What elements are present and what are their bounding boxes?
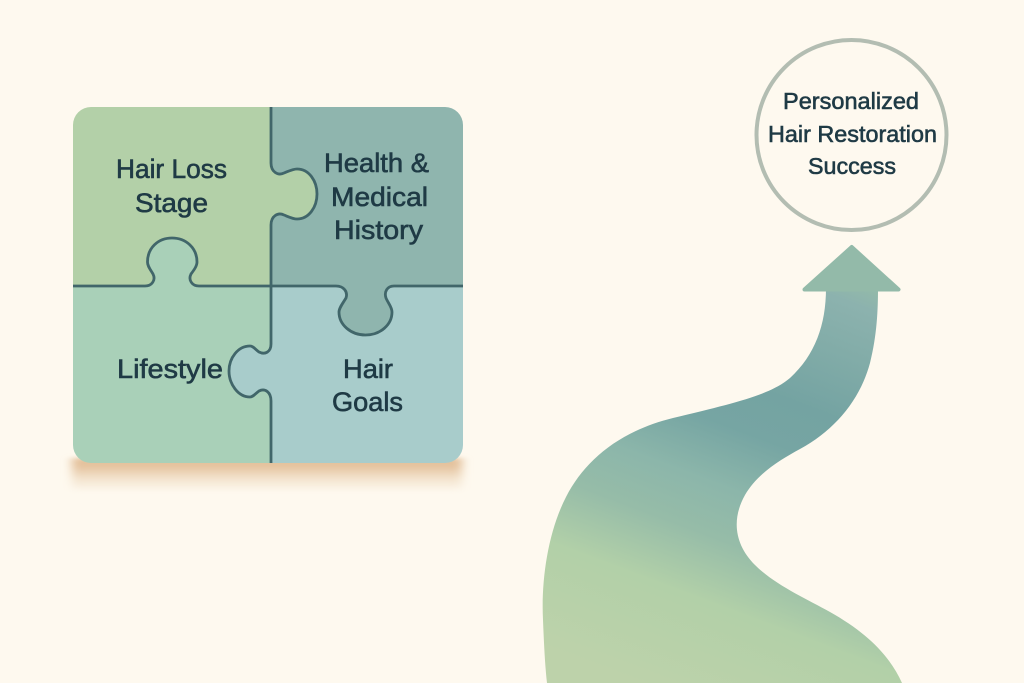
label: Hair Loss Stage: Stage <box>135 188 208 218</box>
goal circle <box>756 40 946 230</box>
label: Hair Goals: Goals <box>332 387 403 417</box>
puzzle piece: Lifestyle <box>73 238 271 463</box>
puzzle piece: Health and Medical History <box>271 107 463 335</box>
arrow head <box>804 247 898 290</box>
label: Hair Loss Stage <box>116 154 227 218</box>
label: Health and Medical History: Medical <box>331 182 428 212</box>
label: Health and Medical History: History <box>334 215 424 245</box>
label: Hair Goals: Hair <box>343 354 393 384</box>
goal label: Success <box>808 153 896 179</box>
goal label <box>768 88 937 179</box>
panel: puzzle <box>73 107 463 463</box>
arrow: winding path to success <box>543 247 902 683</box>
label: Lifestyle: Lifestyle <box>117 354 223 384</box>
label: Hair Loss Stage: Hair Loss <box>116 154 227 184</box>
puzzle piece: Hair Goals <box>229 286 463 463</box>
puzzle piece: Hair Loss Stage <box>73 107 317 286</box>
puzzle seams <box>73 107 463 463</box>
puzzle shadow <box>72 458 462 492</box>
goal label: Personalized <box>783 88 919 114</box>
arrow shaft <box>543 288 902 683</box>
label: Hair Goals <box>332 354 403 417</box>
label: Health and Medical History <box>324 148 429 245</box>
label: Health and Medical History: Health & <box>324 148 429 178</box>
goal label: Hair Restoration <box>768 121 937 147</box>
